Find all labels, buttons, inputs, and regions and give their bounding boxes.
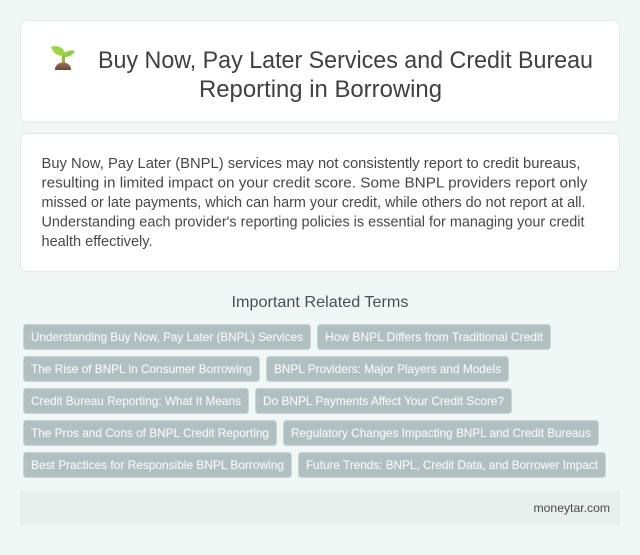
footer: moneytar.com <box>534 501 610 515</box>
tag: Best Practices for Responsible BNPL Borrowing <box>31 458 284 472</box>
panel: summary text: missed or late payments, which can harm your credit, while others do not report at all. <box>42 195 586 211</box>
heading: Reporting in Borrowing <box>199 76 442 103</box>
tag <box>266 356 508 382</box>
tag: Understanding Buy Now, Pay Later (BNPL) Services <box>31 330 303 344</box>
panel: summary text: Understanding each provider's reporting policies is essential for managing your credit <box>42 214 584 230</box>
tag <box>298 452 606 478</box>
icon: seedling <box>51 46 75 70</box>
tag <box>24 420 276 446</box>
tag: The Pros and Cons of BNPL Credit Reporting <box>31 426 269 440</box>
tag: Regulatory Changes Impacting BNPL and Credit Bureaus <box>291 426 591 440</box>
tag <box>318 324 550 350</box>
panel: summary text <box>20 134 620 272</box>
tag: BNPL Providers: Major Players and Models <box>274 362 501 376</box>
heading: related terms: Important Related Terms <box>232 294 408 311</box>
tag <box>24 388 248 414</box>
panel: title card <box>20 20 620 122</box>
tag <box>256 388 512 414</box>
panel: summary text: health effectively. <box>42 234 152 250</box>
tag <box>24 452 292 478</box>
heading <box>98 47 593 103</box>
tag <box>24 324 310 350</box>
tag: Do BNPL Payments Affect Your Credit Score? <box>263 394 504 408</box>
heading: Buy Now, Pay Later Services and Credit Bureau <box>98 47 593 74</box>
tag <box>284 420 598 446</box>
tag list <box>24 324 606 478</box>
tag: Future Trends: BNPL, Credit Data, and Borrower Impact <box>306 458 599 472</box>
footer <box>20 491 620 525</box>
tag: The Rise of BNPL in Consumer Borrowing <box>31 362 252 376</box>
panel: summary text: resulting in limited impact on your credit score. Some BNPL providers report only <box>42 176 588 192</box>
tag <box>24 356 260 382</box>
tag: How BNPL Differs from Traditional Credit <box>325 330 544 344</box>
tag: Credit Bureau Reporting: What It Means <box>31 394 241 408</box>
panel: summary text: Buy Now, Pay Later (BNPL) services may not consistently report to credit bureaus, <box>42 156 580 172</box>
